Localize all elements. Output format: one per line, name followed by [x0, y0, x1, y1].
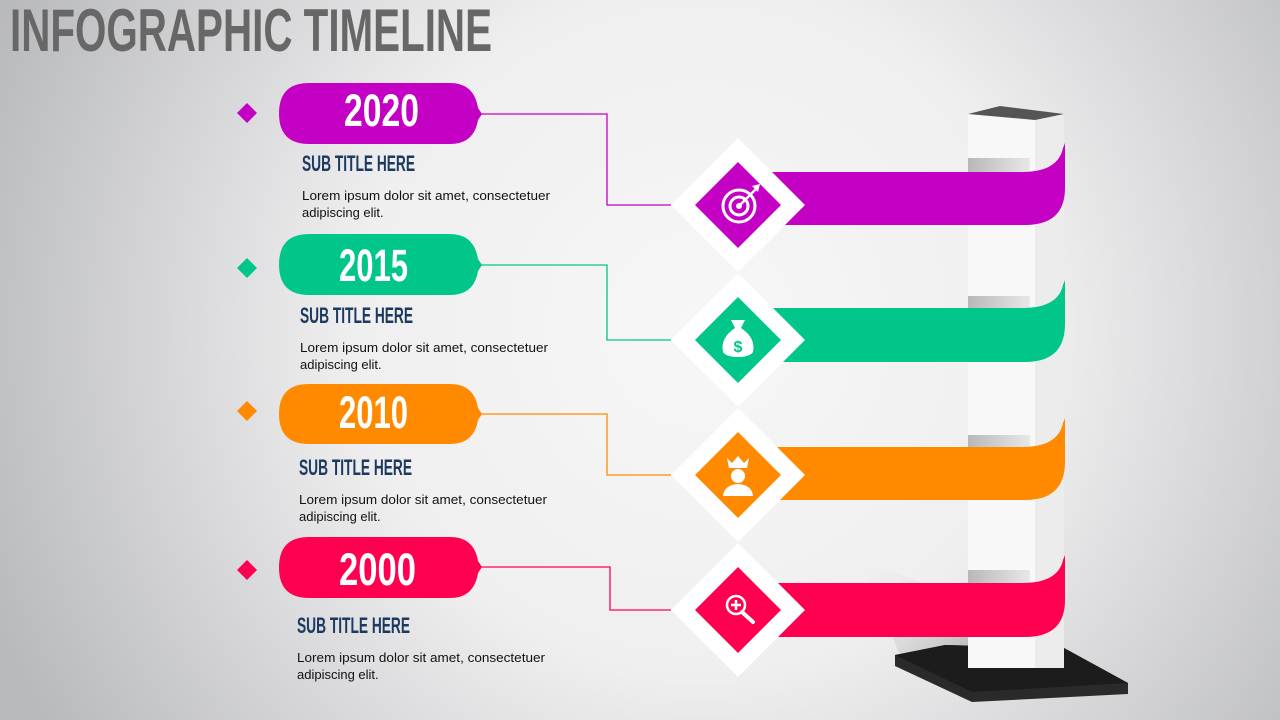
- milestone 2020: SUB TITLE HERE: [302, 151, 415, 176]
- milestone 2000: Lorem ipsum dolor sit amet, consectetuer: [297, 650, 546, 665]
- milestone 2020: [237, 83, 551, 220]
- connectors: [480, 114, 671, 610]
- icon diamond: target: [671, 138, 805, 272]
- milestone 2020: 2020: [344, 85, 419, 136]
- icon diamond: leader: [671, 408, 805, 542]
- milestone 2015: adipiscing elit.: [300, 357, 382, 372]
- milestone 2000: [237, 537, 546, 682]
- band: 2010: [770, 418, 1065, 500]
- milestone 2000: 2000: [339, 544, 416, 595]
- milestone 2010: [237, 384, 548, 524]
- icon diamond: money bag: [671, 273, 805, 407]
- band: 2000: [770, 555, 1065, 637]
- milestone 2000: SUB TITLE HERE: [297, 613, 410, 638]
- icon diamond: zoom: [671, 543, 805, 677]
- milestone 2020: adipiscing elit.: [302, 205, 384, 220]
- milestone 2015: Lorem ipsum dolor sit amet, consectetuer: [300, 340, 549, 355]
- band: 2015: [770, 280, 1065, 362]
- band: 2020: [770, 143, 1065, 225]
- milestone 2020: Lorem ipsum dolor sit amet, consectetuer: [302, 188, 551, 203]
- pillar: [860, 106, 1128, 702]
- milestone 2015: SUB TITLE HERE: [300, 303, 413, 328]
- milestone 2010: adipiscing elit.: [299, 509, 381, 524]
- milestone 2010: 2010: [339, 387, 408, 438]
- milestone 2010: SUB TITLE HERE: [299, 455, 412, 480]
- milestone 2000: adipiscing elit.: [297, 667, 379, 682]
- milestone 2010: Lorem ipsum dolor sit amet, consectetuer: [299, 492, 548, 507]
- icon diamond: money bag: $: [734, 339, 743, 356]
- milestone 2015: [237, 234, 549, 372]
- milestone 2015: 2015: [339, 240, 408, 291]
